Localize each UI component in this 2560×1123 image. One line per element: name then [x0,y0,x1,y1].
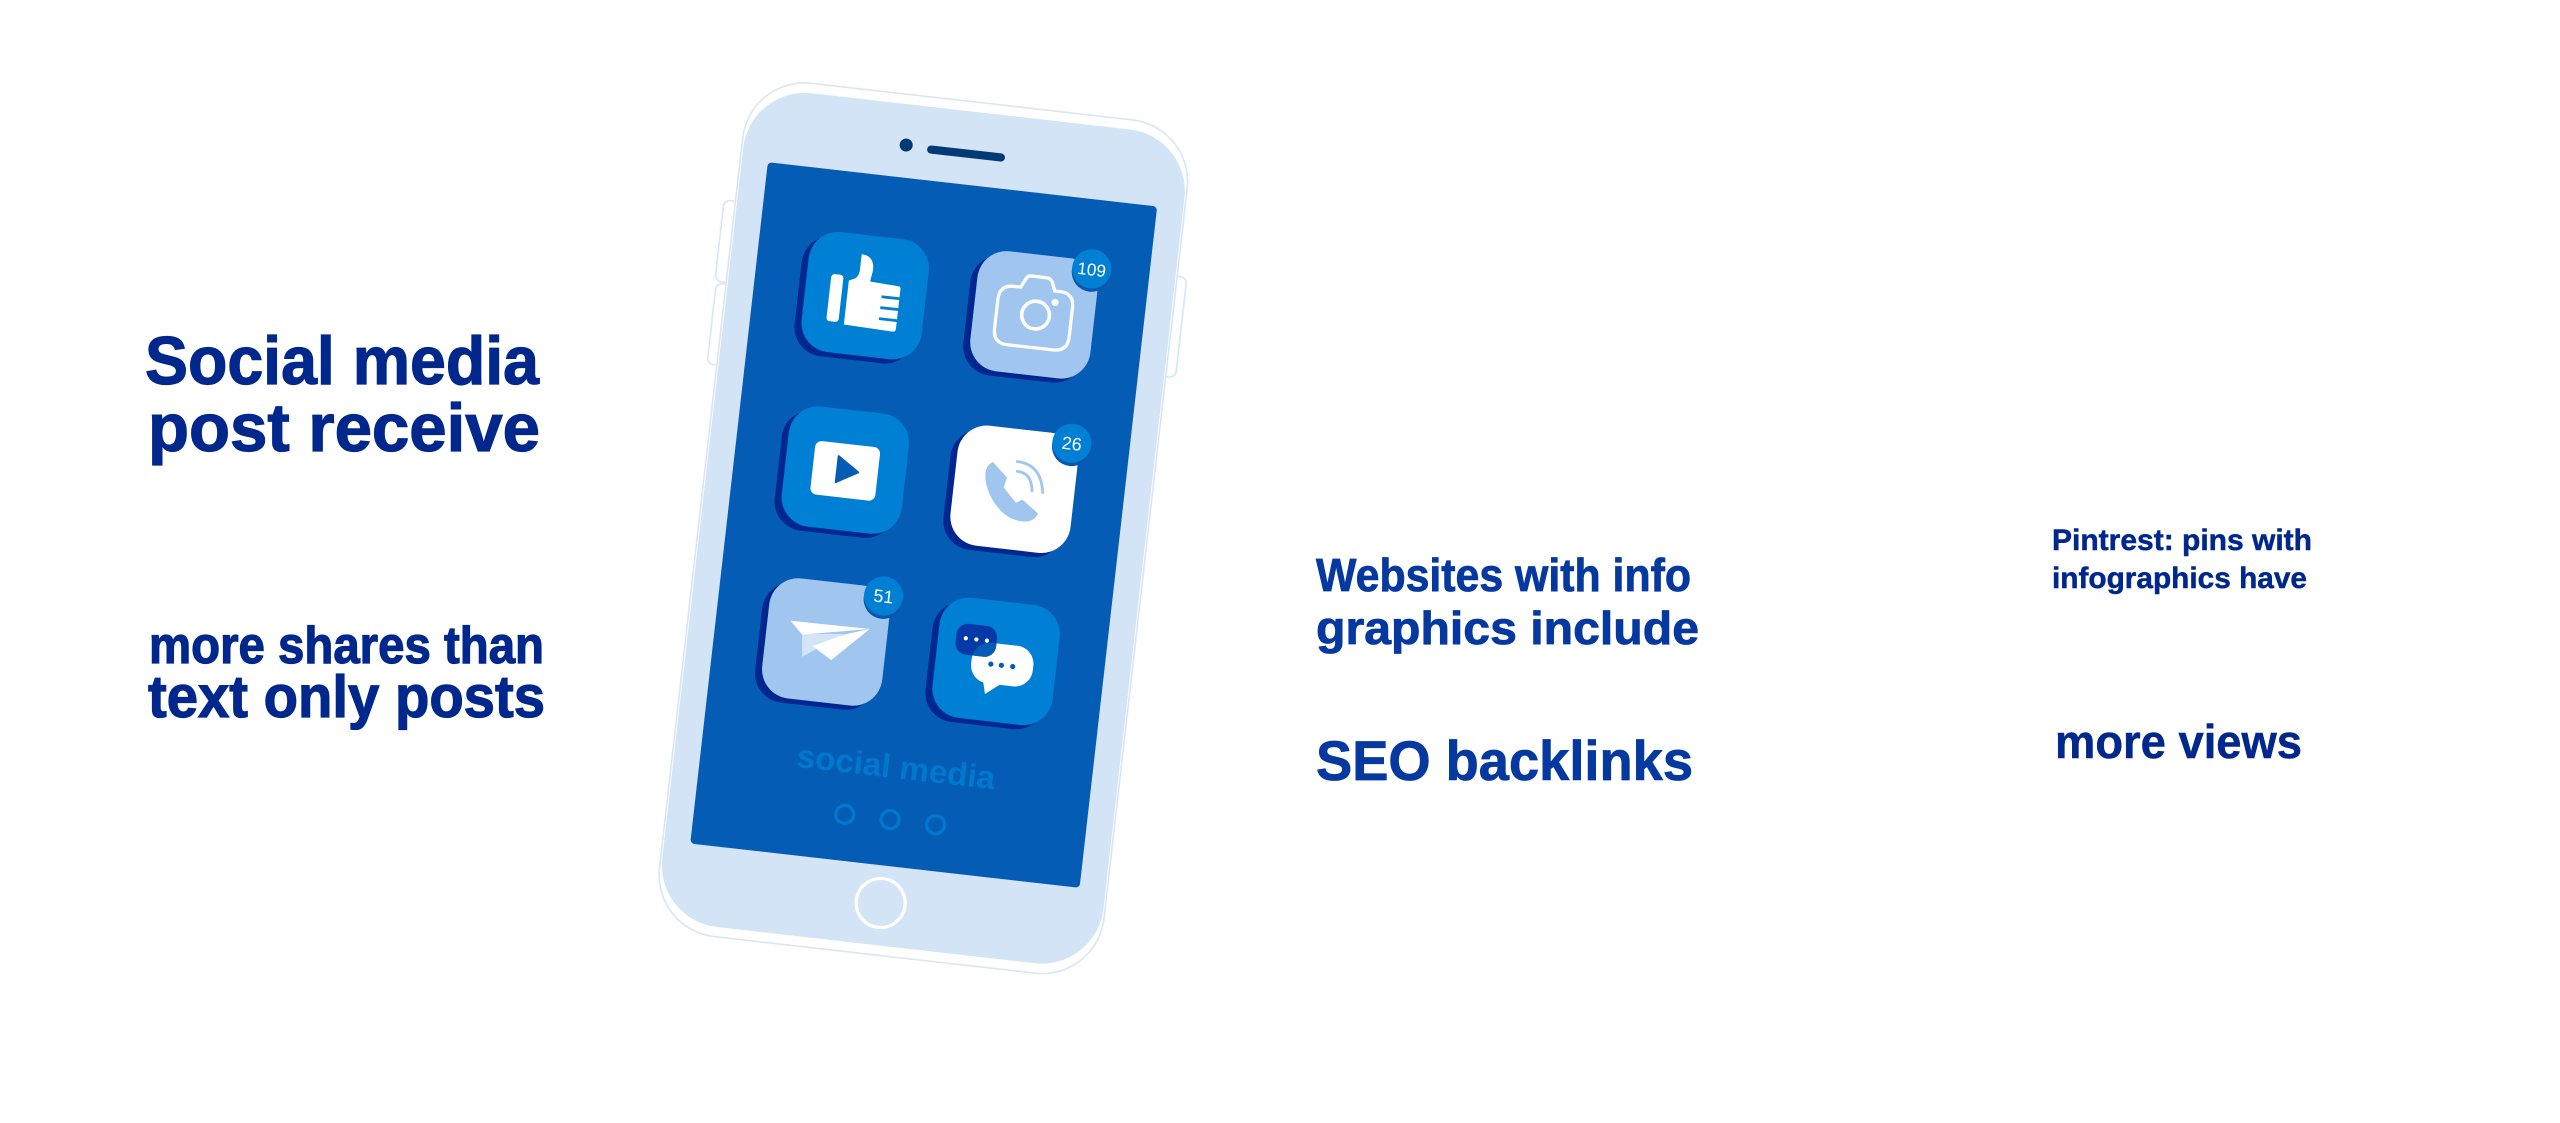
text block: social media shares: post receive [148,390,540,466]
app: video [771,402,912,542]
home button [854,876,908,930]
notification badge: 51 [862,574,905,621]
front camera [899,138,913,152]
notification badge: 26 [1050,422,1094,468]
page indicator dots [835,804,945,835]
app: chat [922,594,1063,733]
phone illustration [641,75,1204,981]
app: like [791,228,932,367]
text block: Pinterest views [2052,524,2312,768]
screen label: social media [795,737,998,796]
text block: social media shares: more shares than [149,617,544,675]
text block: Pinterest views: infographics have [2052,562,2307,595]
app: paper plane [752,563,905,715]
text block: social media shares [145,323,545,730]
text block: websites and SEO backlinks: graphics include [1316,602,1699,654]
notification badge: 109 [1070,247,1113,294]
text block: Pinterest views: more views [2055,715,2302,768]
text block: websites and SEO backlinks: Websites with info [1316,549,1691,601]
notification badge: 109: 109 [1076,258,1107,281]
infographic canvas [146,82,2310,974]
text block: websites and SEO backlinks: SEO backlinks [1316,729,1693,792]
text block: social media shares: Social media [145,323,540,399]
side buttons outline [705,200,1190,417]
app: camera [960,236,1113,388]
text block: Pinterest views: Pintrest: pins with [2052,524,2312,557]
app: phone call [940,410,1094,562]
text block: social media shares: text only posts [148,664,545,730]
notification badge: 26: 26 [1061,433,1083,455]
speaker [927,145,1005,162]
phone body outline [652,76,1194,980]
text block: websites and SEO backlinks [1316,549,1699,792]
screen [690,162,1157,888]
notification badge: 51: 51 [872,585,895,608]
phone body [655,86,1191,970]
